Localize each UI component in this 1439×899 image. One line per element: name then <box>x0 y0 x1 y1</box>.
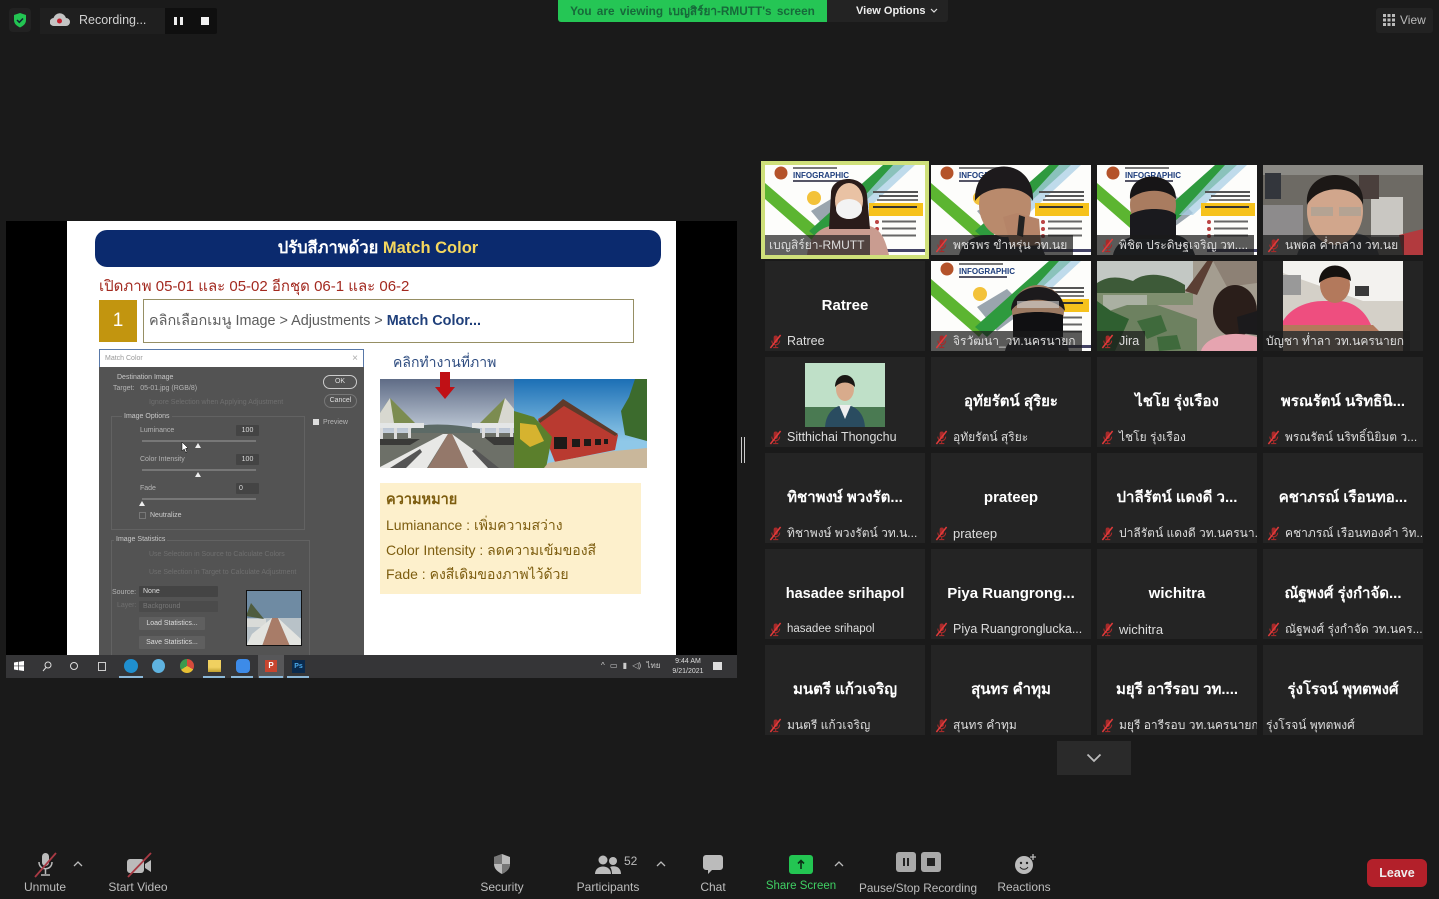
tile: montri: มนตรี แก้วเจริญ <box>793 681 897 698</box>
tile: montri <box>765 645 925 735</box>
meaning box: Color Intensity : ลดความเข้มของสี <box>386 542 596 558</box>
system tray: ^ ▭ ▮ ◁) ไทย <box>601 661 660 670</box>
step number: 1 <box>113 310 123 331</box>
tile: bancha: บัญชา ท่ำลา วท.นครนายก <box>1266 334 1404 348</box>
tile: Sitthichai: Sitthichai Thongchu <box>787 430 897 444</box>
next page chevron <box>1057 741 1131 775</box>
tile: rungroj <box>1263 645 1423 735</box>
tile: sunthon: สุนทร คำทุม <box>953 718 1017 732</box>
shared screen <box>6 221 737 678</box>
tile: prateep <box>931 453 1091 543</box>
click hint: คลิกทำงานที่ภาพ <box>393 354 496 370</box>
search icon <box>42 662 52 672</box>
tile: kachaporn: คชาภรณ์ เรือนทอ... <box>1279 489 1407 506</box>
tile: wichitra: wichitra <box>1149 585 1205 602</box>
tile: sunthon <box>931 645 1091 735</box>
match color dialog: Luminance <box>140 427 174 434</box>
match color dialog: Fade <box>140 485 156 492</box>
security shield badge <box>9 8 31 32</box>
toolbar: chat <box>700 855 726 894</box>
tile: prateep: prateep <box>953 526 997 541</box>
step number <box>99 300 137 342</box>
tile: nattapong: ณัฐพงศ์ รุ่งกำจัด วท.นคร... <box>1285 622 1423 636</box>
tile: phatcharaporn: พชรพร ขำหรุ่น วท.นย <box>953 238 1067 252</box>
folder icon <box>208 660 221 672</box>
match color dialog: Layer: <box>117 602 136 609</box>
toolbar: participants: Participants <box>577 880 639 894</box>
toolbar: reactions <box>997 854 1051 894</box>
match color dialog: Neutralize <box>150 512 182 519</box>
slide title: ปรับสีภาพด้วย Match Color <box>278 239 478 257</box>
start icon <box>14 661 24 671</box>
view layout button <box>1376 8 1433 33</box>
match color dialog: Source: <box>112 589 136 596</box>
leave button: Leave <box>1379 866 1415 880</box>
tile: thichaphong: ทิชาพงษ์ พวงรัตน์ วท.น... <box>787 526 917 540</box>
windows taskbar: P <box>268 661 274 670</box>
dialog title bar <box>99 349 364 367</box>
match color dialog: Destination Image <box>117 374 173 381</box>
viewing banner: You are viewing เบญสิร์ยา-RMUTT's screen <box>570 4 815 18</box>
tile: hasadee: hasadee srihapol <box>786 586 904 602</box>
tile: chaiyo <box>1097 357 1257 447</box>
tile: jirawatana <box>931 261 1091 351</box>
slide <box>67 221 676 655</box>
tile: montri: มนตรี แก้วเจริญ <box>787 718 870 732</box>
tile: wichitra: wichitra <box>1119 622 1163 637</box>
tile: jirawatana: จิรวัฒนา_วท.นครนายก <box>953 334 1076 348</box>
tile: kachaporn <box>1263 453 1423 543</box>
tile: uthairat: อุทัยรัตน์ สุริยะ <box>953 430 1028 444</box>
toolbar: reactions: Reactions <box>997 880 1051 894</box>
tile: Ratree: Ratree <box>822 297 868 314</box>
meaning lines: Lumianance : เพิ่มความสว่าง <box>386 517 563 533</box>
tile: Jira: Jira <box>1119 334 1139 348</box>
powerpoint icon <box>258 655 284 678</box>
tile: piya: Piya Ruangronglucka... <box>953 622 1082 636</box>
unmute caret <box>74 861 82 866</box>
match color dialog: Load Statistics... <box>146 620 198 627</box>
tile: mayuree: มยุรี อารีรอบ วท.นครนายก <box>1119 718 1257 732</box>
tile: prateep: prateep <box>984 489 1038 506</box>
dialog cancel button: Cancel <box>330 397 351 404</box>
meaning box: Fade : คงสีเดิมของภาพไว้ด้วย <box>386 566 569 582</box>
tile: sunthon: สุนทร คำทุม <box>971 681 1051 698</box>
dialog cancel button <box>324 394 357 408</box>
tile: host <box>765 165 925 255</box>
view options button: View Options <box>856 5 925 17</box>
tile: rungroj: รุ่งโรจน์ พุทตพงศ์ <box>1266 718 1355 732</box>
tile: uthairat <box>931 357 1091 447</box>
step text: คลิกเลือกเมนู Image > Adjustments > Match Color... <box>149 313 481 329</box>
tile: piya <box>931 549 1091 639</box>
match color dialog <box>99 349 364 655</box>
match color dialog: 100 <box>242 456 253 463</box>
panel splitter <box>741 437 745 463</box>
tile: host: เบญสิร์ยา-RMUTT <box>769 238 864 252</box>
match color dialog: Image Options <box>124 413 170 420</box>
match color dialog: Target: 05-01.jpg (RGB/8) <box>113 385 197 392</box>
tile: hasadee <box>765 549 925 639</box>
tile: pornrat: พรณรัตน์ นริทธินิ... <box>1281 393 1405 410</box>
tile: hasadee: hasadee srihapol <box>787 623 875 635</box>
tile: pornrat: พรณรัตน์ นริทธิ์นิยิมต ว... <box>1285 430 1417 444</box>
tile: chaiyo: ไชโย รุ่งเรือง <box>1135 393 1219 410</box>
tile: wichitra <box>1097 549 1257 639</box>
meaning heading: ความหมาย <box>386 492 457 508</box>
match color dialog: Preview <box>323 419 348 426</box>
toolbar: participants <box>577 854 639 894</box>
dialog preview thumbnail <box>246 590 302 646</box>
tile: uthairat: อุทัยรัตน์ สุริยะ <box>964 393 1058 410</box>
toolbar: security <box>480 854 524 894</box>
tile: nattapong <box>1263 549 1423 639</box>
toolbar: pause stop recording: Pause/Stop Recording <box>859 881 977 895</box>
tile: mayuree: มยุรี อารีรอบ วท.... <box>1116 681 1238 698</box>
step text <box>143 299 634 343</box>
mouse pointer <box>182 442 188 453</box>
clock: 9/21/2021 <box>672 668 704 675</box>
participants caret <box>656 861 666 866</box>
recording status bar <box>40 8 217 34</box>
dialog title bar: × <box>352 353 358 364</box>
edge icon <box>124 659 138 673</box>
meaning box <box>380 483 641 594</box>
toolbar: unmute: Unmute <box>24 880 66 894</box>
tile: rungroj: รุ่งโรจน์ พุทตพงศ์ <box>1288 681 1398 698</box>
share caret <box>834 861 844 866</box>
match color dialog: 100 <box>242 427 253 434</box>
clock: 9:44 AM <box>675 658 701 665</box>
match color dialog: Save Statistics... <box>146 639 198 646</box>
tile: nopadol <box>1263 165 1423 255</box>
match color dialog: None <box>143 588 160 595</box>
toolbar: participants: 52 <box>624 854 637 868</box>
slide instruction: เปิดภาพ 05-01 และ 05-02 อีกชุด 06-1 และ 06-2 <box>99 278 409 295</box>
match color dialog: Ignore Selection when Applying Adjustment <box>149 399 283 406</box>
tile: palirat <box>1097 453 1257 543</box>
view options button <box>827 0 948 22</box>
clock <box>672 658 704 675</box>
photoshop icon: Ps <box>294 663 303 670</box>
tile: thichaphong: ทิชาพงษ์ พวงรัต... <box>787 489 903 506</box>
windows taskbar <box>6 655 737 678</box>
toolbar: start video: Start Video <box>108 880 168 894</box>
tile: phatcharaporn <box>931 165 1091 255</box>
view layout button: View <box>1400 13 1426 27</box>
match color dialog: Use Selection in Target to Calculate Adjustment <box>149 569 296 576</box>
match color dialog: Color Intensity <box>140 456 185 463</box>
tile: Ratree <box>765 261 925 351</box>
tile: mayuree <box>1097 645 1257 735</box>
leave button <box>1367 859 1427 887</box>
toolbar: share screen <box>766 855 836 892</box>
tile: phichit <box>1097 165 1257 255</box>
toolbar: chat: Chat <box>700 880 726 894</box>
zoom icon <box>236 659 250 673</box>
dialog OK button <box>323 375 357 389</box>
tile: bancha <box>1263 261 1423 351</box>
toolbar: share screen: Share Screen <box>766 880 836 892</box>
tile: nopadol: นพดล ค่ำกลาง วท.นย <box>1285 238 1398 252</box>
toolbar: unmute <box>24 852 66 894</box>
chrome icon <box>180 659 194 673</box>
photoshop icon <box>292 660 305 673</box>
red down arrow <box>435 372 455 399</box>
slide title <box>95 230 661 267</box>
dialog title bar: Match Color <box>105 355 143 362</box>
tile: thichaphong <box>765 453 925 543</box>
toolbar: pause stop recording <box>859 852 977 895</box>
tile: nattapong: ณัฐพงศ์ รุ่งกำจัด... <box>1284 585 1402 602</box>
match color dialog: 0 <box>239 485 243 492</box>
tile: kachaporn: คชาภรณ์ เรือนทองคำ วิท... <box>1285 526 1423 540</box>
recording status bar: Recording... <box>79 13 146 27</box>
pier photo <box>380 379 514 468</box>
tile: Sitthichai <box>765 357 925 447</box>
match color dialog: Use Selection in Source to Calculate Colors <box>149 551 285 558</box>
tile: phichit: พิชิต ประดิษฐเจริญ วท.... <box>1119 238 1248 252</box>
tile: Ratree: Ratree <box>787 334 825 348</box>
match color dialog: Background <box>143 603 180 610</box>
toolbar: start video <box>108 852 168 894</box>
tile: palirat: ปาลีรัตน์ แดงดี ว... <box>1117 489 1237 506</box>
tile: pornrat <box>1263 357 1423 447</box>
toolbar: security: Security <box>480 880 524 894</box>
red building photo <box>514 379 647 468</box>
viewing banner <box>558 0 827 22</box>
dialog OK button: OK <box>335 378 345 385</box>
tile: Jira <box>1097 261 1257 351</box>
active speaker border <box>761 161 929 259</box>
match color dialog: Image Statistics <box>116 536 165 543</box>
tile: chaiyo: ไชโย รุ่งเรือง <box>1119 430 1186 444</box>
tile: piya: Piya Ruangrong... <box>947 585 1075 602</box>
